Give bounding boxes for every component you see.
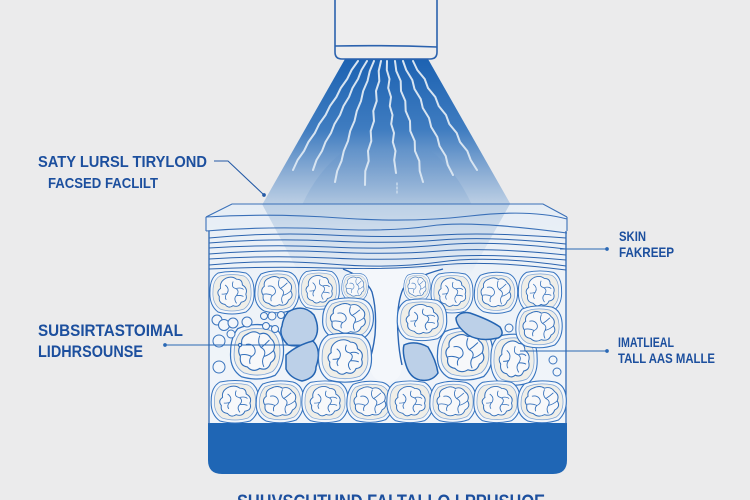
skin surface bbox=[206, 204, 567, 233]
label: skin: FAKREEP bbox=[619, 244, 674, 260]
leader: left label bbox=[164, 343, 300, 347]
beam wavy rays bbox=[293, 61, 477, 193]
leader: lower right label bbox=[520, 350, 608, 352]
label: top left bbox=[38, 154, 207, 192]
leader: top left label bbox=[214, 161, 265, 196]
center channel bbox=[343, 269, 443, 382]
label: lower right: IMATLIEAL bbox=[618, 334, 674, 350]
light beam bbox=[262, 59, 511, 205]
skin and tissue block bbox=[206, 204, 567, 474]
middle fat cell row bbox=[230, 298, 562, 385]
tissue walls bbox=[209, 231, 566, 424]
leader: skin label bbox=[560, 248, 608, 250]
label: lower right bbox=[618, 334, 715, 366]
label: skin bbox=[619, 228, 674, 260]
small fat bubbles bbox=[212, 312, 561, 376]
label: lower right: TALL AAS MALLE bbox=[618, 350, 715, 366]
label: skin: SKIN bbox=[619, 228, 646, 244]
blue base layer bbox=[208, 423, 567, 474]
label: left bbox=[38, 321, 183, 361]
label: top left: FACSED FACLILT bbox=[48, 175, 158, 192]
left blue vessels bbox=[281, 308, 438, 381]
label: top left: SATY LURSL TIRYLOND bbox=[38, 154, 207, 171]
skin wavy layers bbox=[209, 234, 566, 270]
bottom fat cell row bbox=[211, 380, 566, 423]
top fat cell row bbox=[210, 270, 562, 314]
right blue vessel bbox=[456, 313, 502, 339]
channel outline bbox=[343, 269, 443, 365]
block body bbox=[206, 204, 567, 424]
label: left: LIDHRSOUNSE bbox=[38, 342, 143, 361]
device nozzle bbox=[335, 0, 437, 59]
label: left: SUBSIRTASTOIMAL bbox=[38, 321, 183, 340]
beam glow in skin bbox=[262, 204, 510, 275]
